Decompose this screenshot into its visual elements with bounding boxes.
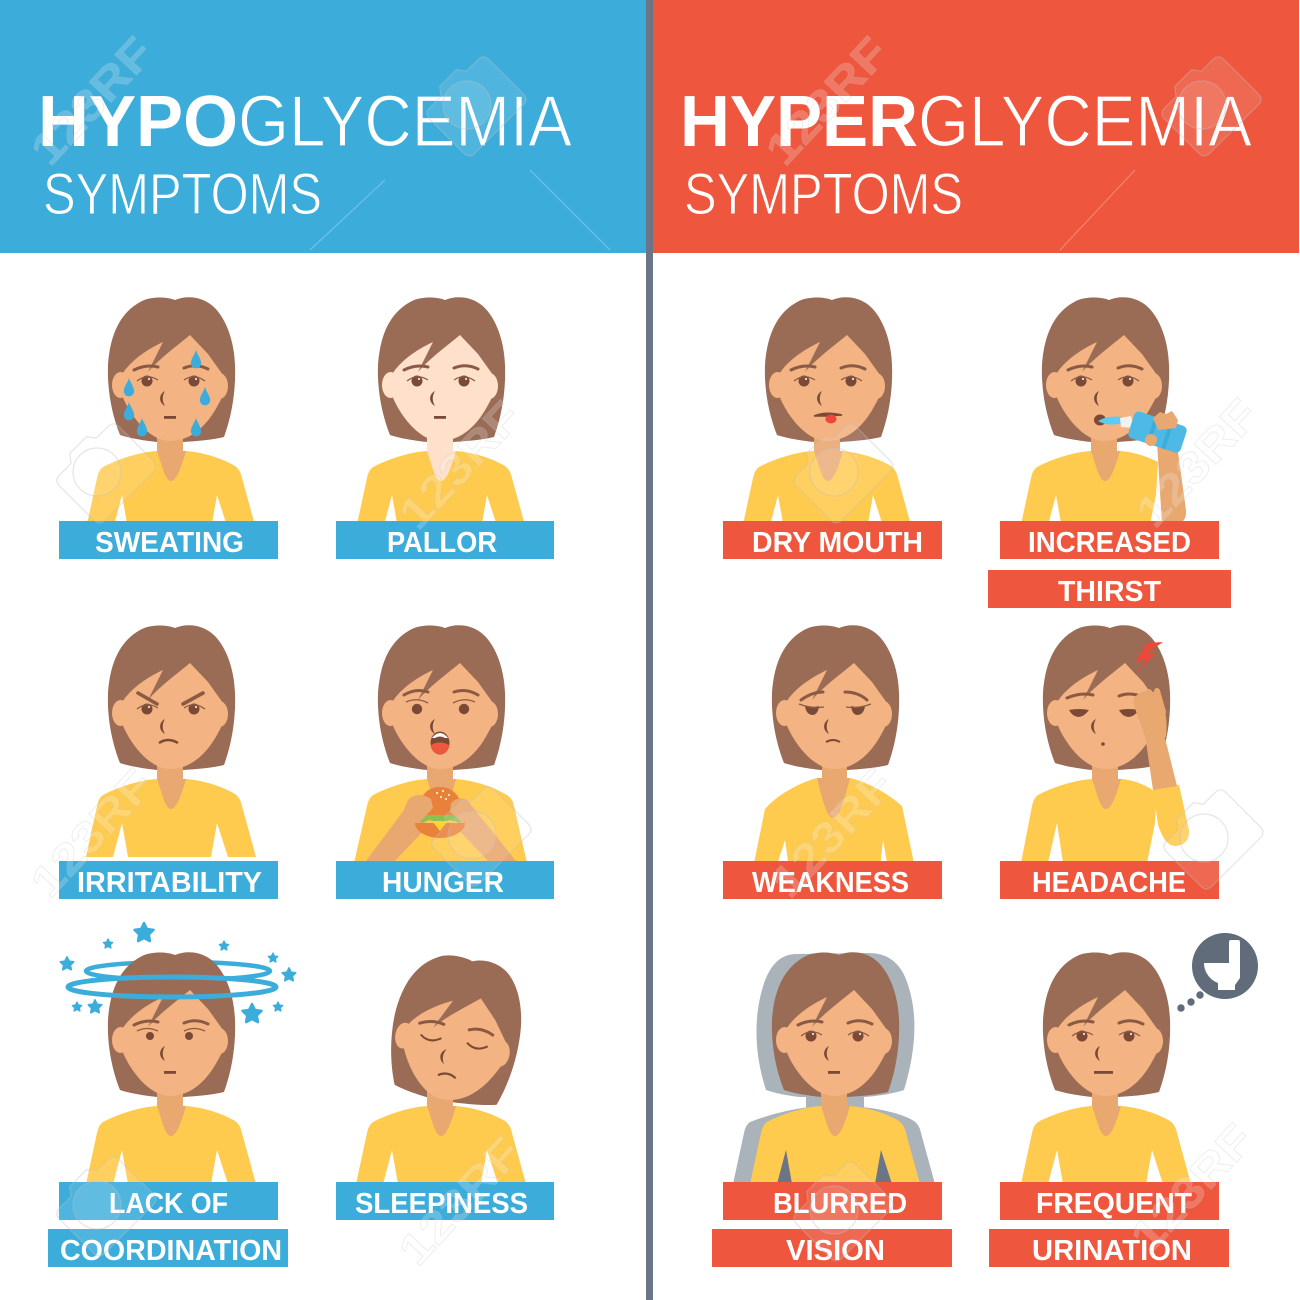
label: dry mouth: DRY MOUTH [752,527,923,559]
watermark overlay: 123RF [1121,1115,1263,1262]
center divider [646,0,653,1300]
label: thirst: THIRST [1058,576,1161,608]
icon: upper dizzy ring [86,962,270,980]
label: pallor: PALLOR [387,527,497,559]
label: vision: VISION [786,1235,885,1267]
figure: woman drinking [1020,297,1188,529]
icon: open mouth [430,732,450,754]
watermark overlay: 123RF [21,760,163,907]
panel: frequent urination [989,933,1258,1267]
panel: dry mouth [723,297,942,559]
label: frequent: FREQUENT [1036,1188,1192,1220]
panel: pallor [336,297,554,559]
label: sweating [59,521,278,559]
icon: raised arm and hand [1133,691,1189,846]
label: weakness: WEAKNESS [752,867,909,899]
label: blurred [723,1182,942,1220]
watermark overlay: 123RF [756,28,898,175]
figure: pale woman [356,297,526,529]
icon: toilet thought bubble [1177,933,1258,1012]
label: lack of [59,1182,278,1220]
label: dry mouth [723,521,942,559]
heading: hyperglycemia: HYPER [680,82,918,162]
heading: hypoglycemia: GLYCEMIA [238,82,572,162]
label: vision [712,1229,952,1267]
figure: sleepy woman [356,947,532,1184]
figure: woman sweating [86,297,256,529]
heading: hyperglycemia: GLYCEMIA [918,82,1252,162]
figure: weak woman [753,625,915,868]
heading: hypoglycemia: HYPO [38,82,238,162]
label: urination [989,1229,1229,1267]
icon: water bottle [1094,410,1188,454]
panel: hunger [336,625,554,899]
label: frequent [1000,1182,1219,1220]
icon: lower dizzy ring and stars [60,923,296,1022]
figure: hungry woman [354,625,527,863]
icon: lightning bolt [1135,642,1163,673]
figure: irritated woman [86,625,256,857]
panel: lack of coordination [48,923,296,1267]
panel: hyperglycemia header [653,0,1299,253]
figure: woman thinking of toilet [1021,952,1191,1184]
label: thirst [988,570,1231,608]
panel: increased thirst [988,297,1231,608]
label: headache: HEADACHE [1032,867,1186,899]
label: hunger: HUNGER [382,867,504,899]
figure: blurred double image [733,952,935,1184]
label: urination: URINATION [1032,1235,1192,1267]
watermark overlay: 123RF [1126,390,1268,537]
label: coordination: COORDINATION [60,1235,282,1267]
label: weakness [723,861,942,899]
label: hunger [336,861,554,899]
panel: weakness [723,625,942,899]
panel: irritability [59,625,278,899]
panel: headache [1000,625,1219,899]
label: blurred: BLURRED [773,1188,907,1220]
watermark overlay: 123RF [389,392,531,539]
label: sleepiness: SLEEPINESS [355,1188,528,1220]
panel: sweating [59,297,278,559]
panel: sleepiness [336,947,554,1220]
watermark overlay: 123RF [389,1128,531,1275]
subheading: symptoms: SYMPTOMS [43,162,322,227]
label: increased: INCREASED [1028,527,1191,559]
label: headache [1000,861,1219,899]
label: sweating: SWEATING [95,527,244,559]
label: lack of: LACK OF [109,1188,228,1220]
icon: arm [1157,438,1186,525]
watermark overlay: 123RF [761,760,903,907]
icon: burger with hands [366,787,516,861]
panel: blurred vision [712,952,952,1267]
label: irritability: IRRITABILITY [77,867,262,899]
figure: woman with headache [1021,625,1189,863]
label: pallor [336,521,554,559]
watermark overlay: 123RF [21,28,163,175]
figure: woman with dry mouth [742,297,912,529]
panel: hypoglycemia header [0,0,646,253]
subheading: symptoms: SYMPTOMS [684,162,963,227]
label: increased [1000,521,1219,559]
figure: dizzy woman [86,952,256,1184]
